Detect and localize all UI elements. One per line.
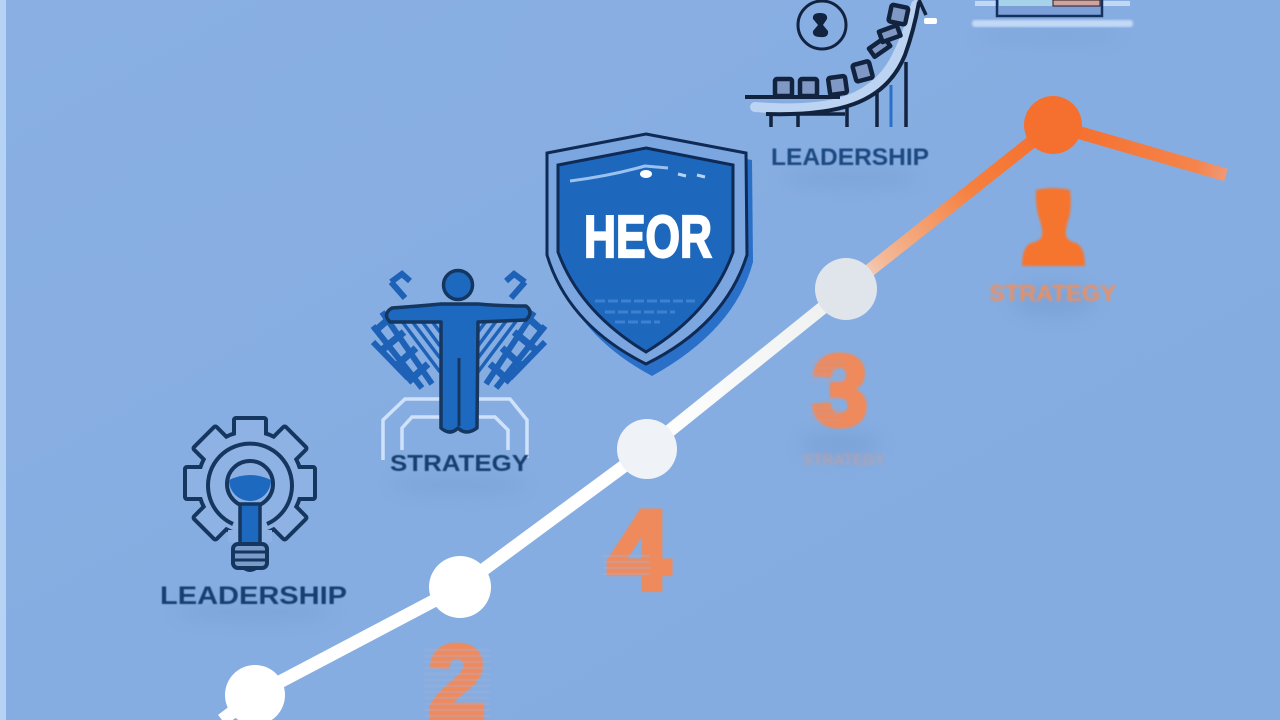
figure: [386, 304, 530, 432]
coaster cars: [775, 5, 908, 96]
arrow tip: [919, 0, 926, 15]
right wing lattice: [478, 312, 545, 388]
icon: cropped device at top: [972, 0, 1133, 27]
fading line segment: [846, 125, 1053, 289]
upper white line segment: [647, 289, 846, 449]
node 2: [429, 556, 491, 618]
light shelf upper: [975, 1, 1130, 6]
left wing lattice: [373, 312, 440, 388]
icon: roller coaster with clock: [745, 0, 937, 127]
label: orange strategy: STRATEGY: [989, 280, 1116, 306]
lower shelf: [972, 20, 1133, 27]
left edge light strip: [0, 0, 6, 720]
stripes on 2: [424, 650, 490, 716]
hourglass glyph: [813, 13, 828, 37]
label: leadership: LEADERSHIP: [160, 582, 347, 610]
soft label shadows: [173, 30, 1125, 621]
number 4: 4: [608, 488, 670, 613]
device frame: [997, 0, 1102, 16]
node 5: [1024, 96, 1082, 154]
icon: gear with light bulb: [187, 420, 313, 572]
icon: orange person silhouette: [1022, 188, 1085, 266]
clock circle: [798, 1, 846, 49]
device screen right: [1053, 0, 1100, 6]
supports: [766, 62, 906, 127]
track: [755, 5, 916, 108]
device screen left: [999, 0, 1053, 6]
shield label: HEOR: [584, 204, 712, 270]
faint label under 3: STRATEGY: [803, 452, 885, 469]
label: leadership upper: LEADERSHIP: [771, 144, 929, 171]
stripes on 4: [603, 556, 650, 574]
white platform arcs: [383, 399, 527, 460]
corner brackets: [391, 274, 410, 298]
growth line with milestones: [222, 96, 1226, 720]
icon: HEOR shield: [547, 134, 753, 376]
orange end segment: [1053, 125, 1226, 175]
number 3: 3: [812, 335, 868, 447]
label: strategy: STRATEGY: [390, 450, 529, 476]
node 3: [617, 419, 677, 479]
icon: person with lattice wings: [373, 270, 545, 460]
white line segments: [222, 449, 647, 720]
stripes on 3: [810, 362, 845, 420]
node 1: [225, 665, 285, 720]
node 4: [815, 258, 877, 320]
